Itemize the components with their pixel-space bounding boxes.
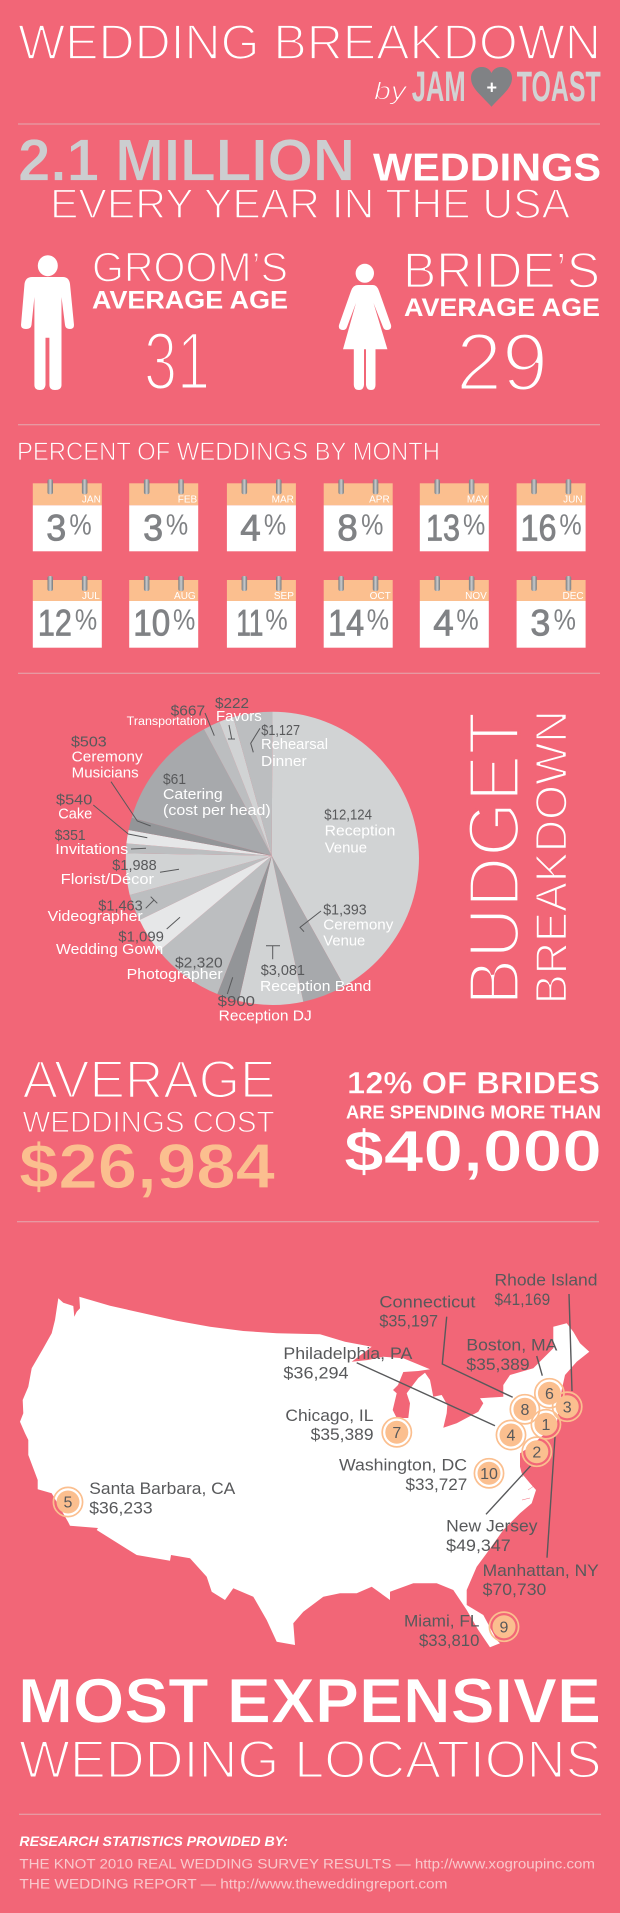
- pie label: catering: $61: [163, 771, 186, 788]
- title: WEDDING BREAKDOWN: [18, 16, 601, 70]
- heading: budget breakdown (vertical): BUDGET: [455, 712, 535, 1006]
- map marker 10: [474, 1459, 504, 1488]
- calendar: december: DEC: [562, 591, 584, 602]
- map label: chicago: $35,389: [311, 1425, 374, 1444]
- calendar: july: 12: [38, 603, 72, 644]
- pie label: favors: [215, 695, 262, 725]
- pie label: photographer: Photographer: [127, 966, 223, 983]
- pie label: favors: Favors: [216, 708, 262, 725]
- stat: average wedding cost: [19, 1050, 276, 1202]
- map label: miami: $33,810: [419, 1631, 479, 1650]
- calendar: march: [227, 479, 296, 551]
- map label: new jersey: New Jersey: [446, 1517, 538, 1536]
- calendar: march: MAR: [272, 495, 294, 506]
- calendar: september: 11: [236, 603, 263, 644]
- map marker 10: 10: [480, 1466, 498, 1483]
- stat: 12% of brides: [344, 1064, 602, 1184]
- pie chart: budget breakdown: [126, 712, 419, 1005]
- map label: chicago: Chicago, IL: [285, 1406, 373, 1425]
- calendar: january: JAN: [82, 495, 101, 506]
- pie label: catering: [163, 771, 271, 819]
- calendar: january: 3: [46, 508, 66, 549]
- pie label: transportation: [127, 703, 207, 728]
- map marker 3: 3: [563, 1399, 572, 1416]
- bride's average age: AVERAGE AGE: [404, 294, 600, 322]
- map marker 5: [53, 1487, 83, 1517]
- calendar: march: 4: [240, 508, 261, 549]
- map label: new jersey: [446, 1517, 538, 1555]
- calendar: december: [517, 576, 586, 648]
- calendar: february: FEB: [178, 495, 198, 506]
- calendar: april: APR: [369, 495, 390, 506]
- calendar: may: [420, 479, 489, 551]
- calendar: december: %: [554, 604, 576, 636]
- calendar: june: [517, 479, 586, 551]
- pie label: reception dj: $900: [218, 993, 255, 1010]
- headline: 2.1 million weddings: 2.1 MILLION: [18, 128, 355, 194]
- pie label: videographer: [48, 898, 143, 925]
- pie label: reception venue: Reception: [325, 823, 395, 840]
- heading: most expensive wedding locations: MOST EXPENSIVE: [18, 1666, 601, 1736]
- map label: miami: [404, 1612, 479, 1650]
- pie leader lines: [93, 713, 321, 994]
- map marker 7: [382, 1418, 411, 1447]
- pie label: photographer: [127, 954, 223, 983]
- pie label: catering: (cost per head): [163, 802, 271, 819]
- icon: bride: [339, 264, 391, 390]
- calendar: december: 3: [530, 603, 550, 644]
- logo: by Jam + Toast: by: [374, 78, 408, 106]
- calendar: august: 10: [133, 603, 170, 644]
- pie label: videographer: Videographer: [48, 908, 143, 925]
- headline: 2.1 million weddings: [18, 128, 601, 227]
- calendar: august: %: [173, 604, 195, 636]
- map label: rhode island: [494, 1271, 598, 1309]
- calendar: february: 3: [143, 508, 163, 549]
- pie label: favors: $222: [215, 695, 249, 712]
- pie label: ceremony venue: [323, 901, 394, 950]
- map marker 6: 6: [545, 1386, 554, 1403]
- map label: connecticut: [379, 1292, 476, 1331]
- calendar: june: JUN: [563, 495, 583, 506]
- calendar: october: %: [367, 604, 389, 636]
- calendar: february: %: [166, 509, 188, 541]
- headline: 2.1 million weddings: WEDDINGS: [373, 146, 601, 189]
- pie label: reception dj: Reception DJ: [219, 1008, 312, 1025]
- sources: THE WEDDING REPORT — http://www.theweddingreport.com: [19, 1876, 447, 1891]
- map label: santa barbara: $36,233: [89, 1498, 153, 1517]
- pie label: reception venue: [324, 806, 395, 856]
- map marker 8: [510, 1395, 540, 1424]
- map marker 2: 2: [532, 1444, 541, 1461]
- calendar: october: OCT: [370, 591, 391, 602]
- map label: new jersey: $49,347: [446, 1536, 511, 1555]
- pie label: reception band: [260, 962, 371, 995]
- pie label: wedding gown: Wedding Gown: [56, 941, 163, 958]
- heading: percent of weddings by month: PERCENT OF WEDDINGS BY MONTH: [17, 438, 440, 466]
- pie label: ceremony musicians: [71, 734, 143, 782]
- map marker 6: [535, 1379, 564, 1408]
- pie label: reception dj: [218, 993, 312, 1025]
- sources: RESEARCH STATISTICS PROVIDED BY:: [19, 1834, 288, 1849]
- map leader lines: [357, 1294, 572, 1558]
- map: united states: [20, 1297, 589, 1647]
- map marker 4: [496, 1420, 526, 1450]
- calendar: may: %: [463, 509, 485, 541]
- pie label: rehearsal dinner: Dinner: [261, 753, 307, 770]
- map label: boston: $35,389: [466, 1355, 530, 1374]
- stat: average wedding cost: AVERAGE: [22, 1050, 276, 1110]
- headline: 2.1 million weddings: EVERY YEAR IN THE USA: [50, 180, 570, 227]
- map label: philadelphia: Philadelphia, PA: [283, 1344, 413, 1363]
- heading: budget breakdown (vertical): [455, 710, 576, 1006]
- map marker 4: 4: [507, 1428, 516, 1445]
- map marker 7: 7: [392, 1425, 401, 1442]
- map marker 9: [489, 1612, 519, 1641]
- calendar: april: [324, 479, 393, 551]
- pie label: ceremony venue: $1,393: [323, 901, 367, 918]
- map label: rhode island: $41,169: [494, 1290, 550, 1309]
- map label: manhattan: Manhattan, NY: [483, 1561, 599, 1580]
- bride's average age: BRIDE’S: [403, 242, 600, 298]
- pie label: reception band: $3,081: [261, 962, 305, 979]
- pie label: rehearsal dinner: [261, 722, 328, 770]
- stat: 12% of brides: ARE SPENDING MORE THAN: [346, 1103, 601, 1123]
- map label: boston: Boston, MA: [466, 1336, 558, 1355]
- pie label: photographer: $2,320: [175, 954, 223, 971]
- heading: budget breakdown (vertical): BREAKDOWN: [527, 710, 576, 1004]
- heading: most expensive wedding locations: [18, 1666, 602, 1790]
- calendar: february: [129, 479, 198, 551]
- pie label: transportation: Transportation: [127, 716, 207, 728]
- pie label: florist: Florist/Décor: [61, 871, 154, 888]
- map label: washington: $33,727: [406, 1475, 467, 1494]
- map label: connecticut: Connecticut: [379, 1292, 476, 1311]
- map label: washington: Washington, DC: [339, 1456, 467, 1475]
- icon: groom: [21, 255, 74, 390]
- pie label: cake: [56, 791, 92, 822]
- calendar: october: 14: [328, 603, 364, 644]
- map marker 3: [553, 1392, 582, 1421]
- pie label: wedding gown: [56, 929, 164, 958]
- logo: by Jam + Toast: +: [486, 78, 497, 98]
- calendar: october: [324, 576, 393, 648]
- calendar: september: %: [265, 604, 288, 636]
- pie label: florist: $1,988: [112, 857, 157, 874]
- calendar: november: 4: [433, 603, 454, 644]
- map label: connecticut: $35,197: [379, 1312, 438, 1331]
- map label: washington: [339, 1456, 467, 1494]
- map label: chicago: [285, 1406, 374, 1444]
- calendar: november: [420, 576, 489, 648]
- pie label: reception band: Reception Band: [260, 978, 371, 995]
- map marker 2: [522, 1437, 551, 1466]
- pie label: ceremony musicians: Musicians: [72, 765, 139, 782]
- map label: boston: [466, 1336, 558, 1374]
- map marker 1: 1: [541, 1417, 550, 1434]
- heading: most expensive wedding locations: WEDDING LOCATIONS: [19, 1731, 602, 1790]
- pie label: reception venue: Venue: [325, 839, 367, 856]
- logo: by Jam + Toast: [374, 63, 601, 111]
- calendar: july: %: [75, 604, 97, 636]
- groom's average age: AVERAGE AGE: [92, 286, 288, 314]
- sources: THE KNOT 2010 REAL WEDDING SURVEY RESULTS — http://www.xogroupinc.com: [19, 1856, 595, 1871]
- calendar: may: 13: [426, 508, 460, 549]
- pie label: ceremony venue: Ceremony: [323, 916, 394, 933]
- map marker 9: 9: [500, 1619, 509, 1636]
- calendar: march: %: [264, 509, 286, 541]
- pie label: rehearsal dinner: Rehearsal: [261, 736, 328, 753]
- stat: average wedding cost: $26,984: [19, 1132, 275, 1202]
- groom's average age: [92, 244, 288, 407]
- map label: philadelphia: $36,294: [283, 1363, 349, 1382]
- map label: santa barbara: Santa Barbara, CA: [89, 1479, 236, 1498]
- pie label: transportation: $667: [171, 703, 205, 720]
- calendar: april: 8: [337, 508, 358, 549]
- calendar: may: MAY: [467, 495, 488, 506]
- map label: santa barbara: [89, 1479, 236, 1517]
- calendar: august: [129, 576, 198, 648]
- pie label: ceremony musicians: $503: [71, 734, 107, 751]
- groom's average age: GROOM’S: [92, 244, 288, 291]
- calendar: january: %: [69, 509, 92, 541]
- map label: manhattan: $70,730: [483, 1580, 546, 1599]
- calendar: august: AUG: [174, 591, 196, 602]
- pie label: ceremony venue: Venue: [323, 933, 365, 950]
- calendar: july: [33, 576, 102, 648]
- calendar: june: %: [559, 509, 582, 541]
- pie label: ceremony musicians: Ceremony: [72, 749, 143, 766]
- map marker 8: 8: [520, 1402, 529, 1419]
- map label: miami: Miami, FL: [404, 1612, 479, 1631]
- map label: rhode island: Rhode Island: [494, 1271, 598, 1290]
- calendar: september: [227, 576, 296, 648]
- groom's average age: 31: [144, 316, 210, 407]
- calendar: november: NOV: [465, 591, 487, 602]
- pie label: wedding gown: $1,099: [118, 929, 164, 946]
- pie label: catering: Catering: [163, 786, 223, 803]
- pie label: florist: [61, 857, 157, 888]
- calendar: april: %: [361, 509, 383, 541]
- pie label: cake: $540: [56, 791, 92, 808]
- logo: by Jam + Toast: JAM: [412, 63, 466, 111]
- stat: 12% of brides: 12% OF BRIDES: [347, 1064, 600, 1100]
- calendar: january: [33, 479, 102, 551]
- pie label: invitations: $351: [55, 827, 86, 844]
- pie label: invitations: [55, 827, 128, 858]
- calendar: june: 16: [520, 508, 556, 549]
- stat: 12% of brides: $40,000: [344, 1119, 602, 1184]
- map label: manhattan: [483, 1561, 599, 1599]
- map marker 1: [531, 1410, 561, 1439]
- bride's average age: [403, 242, 600, 408]
- calendar: november: %: [456, 604, 479, 636]
- stat: average wedding cost: WEDDINGS COST: [22, 1106, 274, 1139]
- pie label: reception venue: $12,124: [324, 806, 372, 823]
- pie label: invitations: Invitations: [55, 841, 128, 858]
- pie label: videographer: $1,463: [98, 898, 143, 915]
- sources: [19, 1834, 595, 1891]
- pie label: rehearsal dinner: $1,127: [261, 722, 300, 739]
- pie label: cake: Cake: [58, 805, 92, 822]
- map marker 5: 5: [64, 1495, 73, 1512]
- calendars by month: [33, 479, 586, 648]
- map label: philadelphia: [283, 1344, 413, 1382]
- calendar: september: SEP: [274, 591, 294, 602]
- bride's average age: 29: [456, 317, 548, 408]
- calendar: july: JUL: [82, 591, 100, 602]
